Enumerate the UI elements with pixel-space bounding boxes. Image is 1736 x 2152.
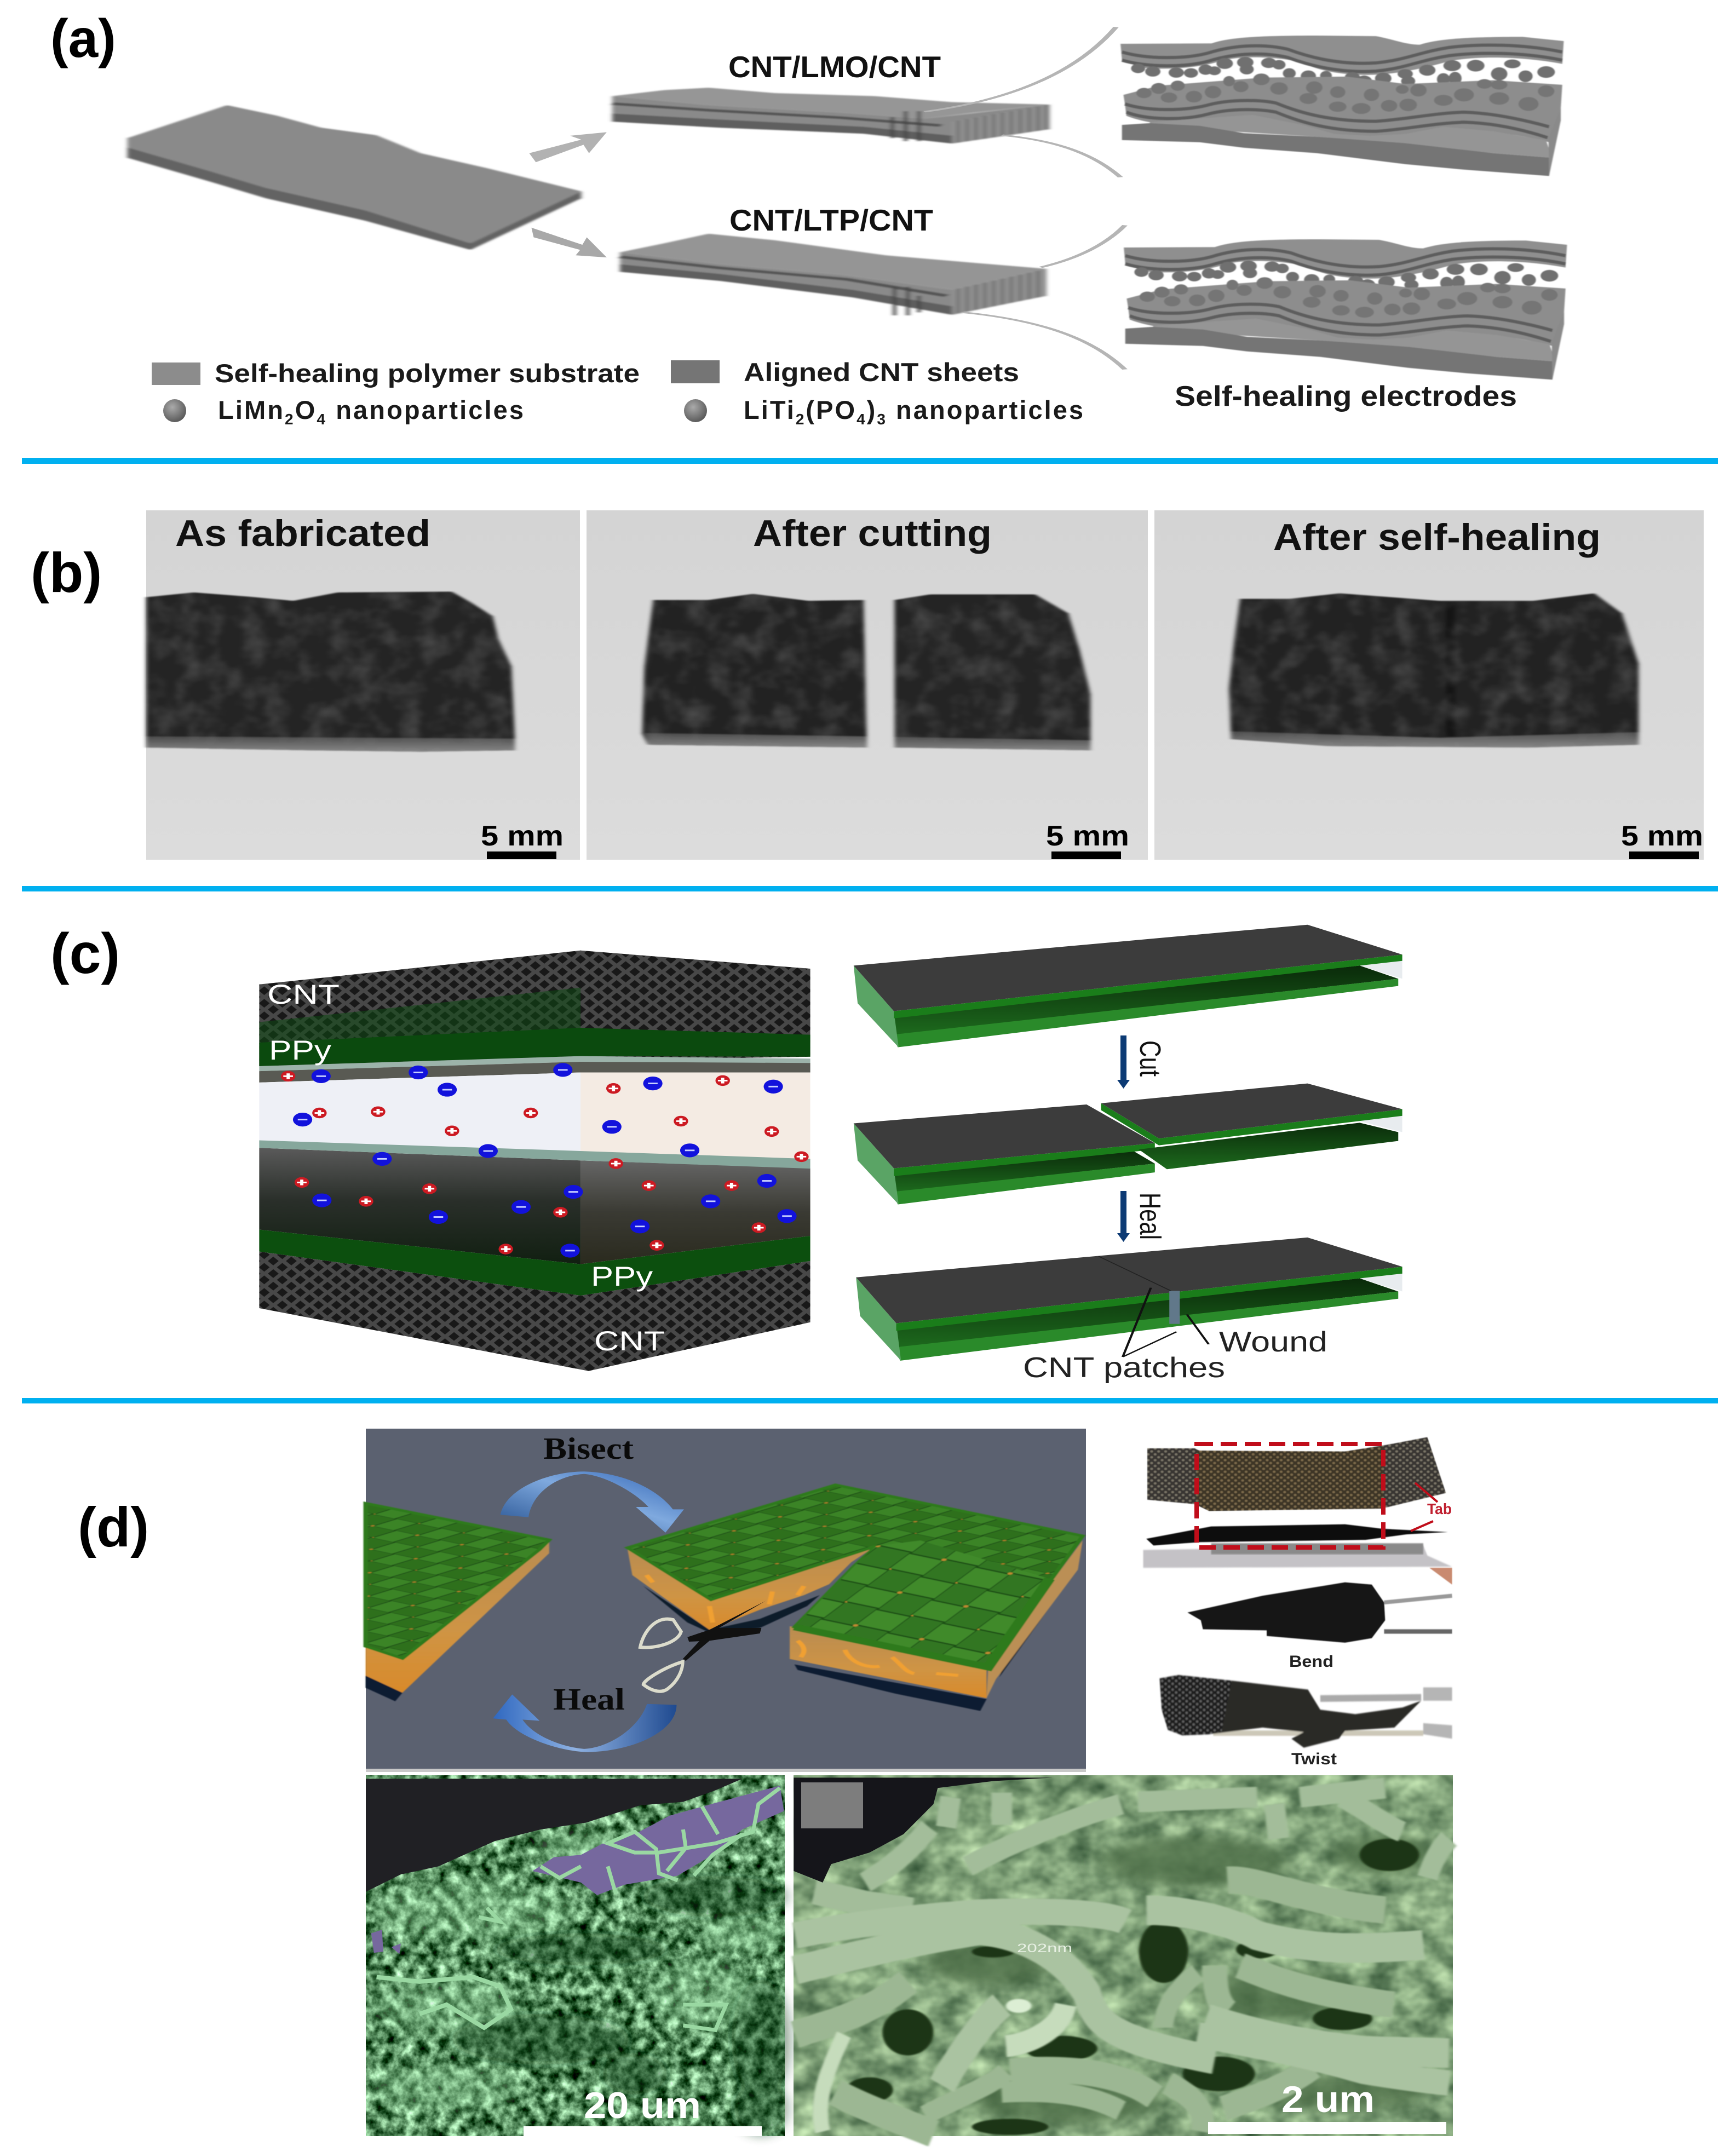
scale text 2 um: 2 um: [1281, 2079, 1375, 2120]
device cube diagram: [259, 951, 810, 1371]
legend text polymer: Self-healing polymer substrate: [215, 359, 640, 388]
electrode cross-section LMO: [1120, 36, 1563, 176]
ions: [281, 1063, 809, 1258]
legend text LTP: 2: [796, 411, 804, 428]
legend: [152, 358, 1083, 428]
legend swatch CNT: [671, 360, 720, 383]
legend text LTP: nanoparticles: [887, 395, 1083, 424]
legend ball LMO: [163, 399, 186, 422]
label (d): (d): [78, 1496, 149, 1558]
scale bar: [524, 2126, 762, 2136]
layered sheet LTP: [620, 234, 1047, 315]
label (a): (a): [50, 8, 116, 68]
sheet: healed device: [856, 1238, 1402, 1361]
red arrows: [1411, 1483, 1438, 1531]
panel: d, woven electrode: [78, 1429, 1453, 2136]
arrow to CNT/LMO/CNT: [529, 132, 607, 162]
legend text LMO: nanoparticles: [327, 395, 524, 424]
scissors: [640, 1601, 766, 1691]
photo: twist: [1160, 1675, 1452, 1768]
text: twist: Twist: [1291, 1750, 1337, 1768]
text: bend: Bend: [1289, 1653, 1333, 1671]
legend text CNT: Aligned CNT sheets: [744, 358, 1019, 387]
photo: after cutting: [587, 510, 1148, 860]
arrow: cut: [1117, 1035, 1166, 1089]
label (b): (b): [31, 542, 102, 604]
panel: c, supercapacitor structure: [50, 922, 1402, 1384]
bisect arrow: [501, 1471, 684, 1533]
photo: as fabricated: [146, 510, 580, 860]
photo: flat woven electrode with tab: [1143, 1437, 1452, 1568]
legend text LTP: LiTi: [744, 395, 794, 424]
cube label PPy top: PPy: [269, 1035, 331, 1066]
legend text LMO: 2: [285, 411, 294, 428]
callout curves LMO: [924, 27, 1120, 177]
callout curves LTP: [963, 225, 1125, 370]
scale bar: [1208, 2122, 1446, 2134]
substrate sheet: [127, 105, 581, 250]
scale text 20 um: 20 um: [584, 2085, 701, 2126]
text: bisect: Bisect: [543, 1432, 634, 1466]
inset grey box: [801, 1782, 863, 1828]
photo: after self-healing: [1154, 510, 1704, 860]
legend text LTP: ): [867, 395, 875, 424]
legend text LMO: O: [295, 395, 315, 424]
text: tab: Tab: [1427, 1500, 1452, 1517]
legend text LTP: 3: [877, 411, 886, 428]
SEM image: low magnification: [366, 1775, 791, 2136]
heading CNT/LTP/CNT: CNT/LTP/CNT: [729, 203, 933, 237]
label: CNT patches: CNT patches: [1023, 1352, 1225, 1384]
heal arrow: [493, 1694, 676, 1752]
label (c): (c): [50, 922, 120, 986]
caption self-healing electrodes: Self-healing electrodes: [1175, 381, 1517, 412]
label: wound: Wound: [1219, 1326, 1327, 1358]
SEM image: high magnification: [794, 1775, 1453, 2136]
text: heal: Heal: [553, 1683, 625, 1717]
nanofiber rods: [795, 1788, 1449, 2134]
heading CNT/LMO/CNT: CNT/LMO/CNT: [728, 50, 941, 84]
scale bar 5 mm: 5 mm: [481, 820, 564, 852]
layered sheet LMO: [612, 88, 1050, 143]
cube label CNT bottom: CNT: [594, 1326, 665, 1356]
panel: a, electrode fabrication schematic: [50, 8, 1567, 428]
cut woven block: [628, 1485, 1083, 1711]
text: Heal: Heal: [1134, 1193, 1166, 1240]
panel: b, photos of cutting and healing: [31, 510, 1704, 860]
measurement 202nm: 202nm: [1017, 1941, 1072, 1955]
sheet: cut device: [854, 1084, 1402, 1205]
legend text LMO: LiMn: [218, 395, 283, 424]
photo: bend: [1187, 1568, 1452, 1671]
cube label CNT top: CNT: [267, 979, 340, 1010]
electrode cross-section LTP: [1124, 239, 1567, 379]
heading as fabricated: As fabricated: [175, 513, 430, 554]
scale bar 5 mm: 5 mm: [1046, 820, 1129, 852]
arrow to CNT/LTP/CNT: [531, 228, 607, 257]
shading of low magnification fibers: [366, 1779, 791, 2136]
dark background corner: [794, 1777, 1053, 1883]
legend text LTP: (PO: [806, 395, 855, 424]
cube label PPy bottom: PPy: [591, 1261, 653, 1292]
heading after cutting: After cutting: [753, 513, 992, 554]
heading after self-healing: After self-healing: [1273, 516, 1601, 558]
scale bar 5 mm: 5 mm: [1621, 820, 1703, 852]
arrow: heal: [1117, 1191, 1166, 1242]
legend swatch polymer: [152, 362, 200, 385]
legend text LMO: 4: [317, 411, 325, 428]
red dashed box: [1197, 1444, 1383, 1547]
legend ball LTP: [684, 399, 707, 422]
text: Cut: Cut: [1134, 1040, 1166, 1077]
left woven block: [366, 1503, 549, 1701]
legend text LTP: 4: [856, 411, 865, 428]
render: bisect and heal cycle: [366, 1429, 1086, 1772]
sheet: pristine device: [854, 925, 1402, 1048]
